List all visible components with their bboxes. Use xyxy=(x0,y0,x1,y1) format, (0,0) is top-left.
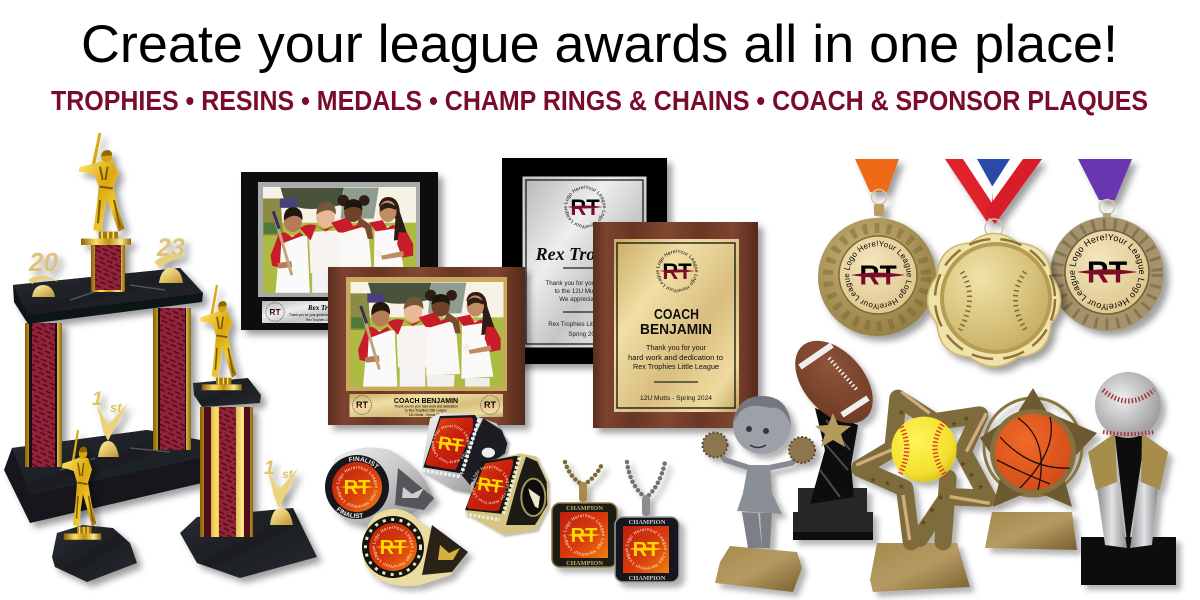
title: Create your league awards all in one place! xyxy=(81,15,1118,74)
pendant: silver champion chain xyxy=(614,460,688,591)
trophy: single-column batter xyxy=(180,285,317,578)
resin: football xyxy=(780,326,888,540)
first-place topper: st xyxy=(282,467,294,481)
small stars: ★ xyxy=(928,505,936,514)
nameplate: Rex Trophies Little League xyxy=(306,318,344,322)
resin: silver baseball xyxy=(1081,372,1176,585)
left logo xyxy=(353,396,371,414)
medal: laurel medal with purple ribbon xyxy=(1050,159,1174,340)
face xyxy=(325,455,389,519)
photo xyxy=(260,185,418,296)
nameplate: Thank you for your generous support xyxy=(289,313,341,317)
ribbon xyxy=(945,159,1042,224)
ring: silver league ring xyxy=(422,413,511,496)
figure: top batter xyxy=(79,133,131,245)
plaque text: to the 12U Mutts team xyxy=(555,288,615,295)
trophy: small single batter xyxy=(52,430,137,582)
nameplate: 12U Mutts - Spring 2024 xyxy=(409,413,443,417)
logo: Your League Logo Here!Your League Logo Here! xyxy=(656,250,698,292)
pendant: bronze champion chain xyxy=(551,460,626,576)
face: Your League Logo Here!Your League Logo Here! xyxy=(372,526,414,568)
pendant: silver champion chain: Your League Logo Here!Your League Logo Here! xyxy=(625,528,667,570)
first-place topper xyxy=(92,389,128,457)
column xyxy=(200,407,253,537)
small stars: ★ xyxy=(968,471,975,480)
small stars: ★ xyxy=(937,493,944,502)
pendant: bronze champion chain: CHAMPION xyxy=(566,560,603,567)
small stars: ★ xyxy=(920,518,927,527)
plaque text: COACH xyxy=(654,306,699,323)
wavy rim xyxy=(928,234,1060,366)
small stars: ★ xyxy=(869,475,877,484)
upper column xyxy=(91,242,125,292)
photo xyxy=(348,280,506,390)
first-place topper: 1 xyxy=(264,458,275,479)
right logo: RT xyxy=(484,400,496,410)
pendant: silver champion chain: RT xyxy=(633,539,659,561)
nameplate: COACH BENJAMIN xyxy=(394,398,458,405)
pendant: silver champion chain: CHAMPION xyxy=(629,575,666,582)
plaque text: Rex Trophies Little League xyxy=(633,364,719,371)
pom-poms xyxy=(702,432,815,463)
ring: gold league ring xyxy=(464,453,552,538)
plaque text: Rex Trophies xyxy=(535,244,634,264)
medal: gold baseball medal with red white blue ribbon xyxy=(928,159,1060,366)
plaque: walnut photo plaque xyxy=(328,267,525,425)
left column xyxy=(25,323,62,467)
logo: RT xyxy=(570,195,600,220)
plaque text: Rex Trophies Little League xyxy=(548,321,622,328)
first-place topper xyxy=(264,458,298,525)
first-place topper: 1 xyxy=(92,389,103,410)
small stars: ★ xyxy=(950,420,958,429)
face: RT xyxy=(380,537,406,559)
face: FINALIST xyxy=(348,456,380,468)
face: Your League Logo Here!Your League Logo Here! xyxy=(336,466,378,508)
logo: Your League Logo Here!Your League Logo Here! xyxy=(1070,234,1144,310)
plaque text: Thank you for your generous xyxy=(545,280,625,287)
top plank xyxy=(13,268,203,324)
trophy: large double-column baseball trophy xyxy=(4,133,203,523)
resin: softball star xyxy=(856,392,990,592)
small stars: ★ xyxy=(959,460,967,469)
plaque text: hard work and dedication to xyxy=(628,355,723,362)
face xyxy=(362,516,424,578)
small stars: ★ xyxy=(963,414,970,423)
pendant: silver champion chain: CHAMPION xyxy=(629,519,666,526)
face: RT xyxy=(476,473,504,497)
plaque: black sponsor plaque with silver plate xyxy=(502,158,676,374)
pendant: bronze champion chain: RT xyxy=(571,525,597,547)
small stars: ★ xyxy=(884,479,891,488)
plaque text: 12U Mutts - Spring 2024 xyxy=(640,395,712,402)
logo: RT xyxy=(662,259,692,284)
year topper 23: 23 xyxy=(156,234,185,262)
right column xyxy=(153,308,191,450)
plaque text: BENJAMIN xyxy=(640,321,712,338)
right logo xyxy=(481,396,499,414)
face: RT xyxy=(344,477,370,499)
face: Your League Logo Here!Your League Logo Here! xyxy=(432,424,470,464)
pendant: bronze champion chain: CHAMPION xyxy=(566,505,603,512)
plaque text: We appreciate you xyxy=(559,296,611,303)
nameplate: RT xyxy=(269,307,281,317)
plaque text xyxy=(535,244,634,338)
small stars xyxy=(869,408,984,527)
year topper 20 xyxy=(28,247,58,297)
nameplate xyxy=(262,301,362,323)
ring: gold star ring xyxy=(362,508,475,594)
baseball seams xyxy=(960,272,1027,332)
year topper 20: 20 xyxy=(28,247,58,277)
first-place topper: st xyxy=(110,400,122,415)
face: Your League Logo Here!Your League Logo Here! xyxy=(471,465,509,504)
base plank xyxy=(4,430,202,523)
plaque text: Spring 2024 xyxy=(568,331,602,338)
medal: star medal with orange ribbon xyxy=(818,159,940,346)
pendant: bronze champion chain: Your League Logo Here!Your League Logo Here! xyxy=(563,514,605,556)
face: RT xyxy=(437,432,465,456)
face: FINALIST xyxy=(336,506,363,518)
face xyxy=(426,417,474,470)
nameplate: Rex Trophies xyxy=(307,304,347,312)
nameplate: Thank you for your hard work and dedication xyxy=(394,404,458,408)
left logo: RT xyxy=(356,400,368,410)
resin: basketball star xyxy=(980,388,1097,550)
small stars: ★ xyxy=(898,482,905,491)
plaque: black photo plaque xyxy=(241,172,438,330)
small stars: ★ xyxy=(898,408,905,417)
nameplate xyxy=(350,394,503,417)
logo: RT xyxy=(1087,257,1128,290)
plaque text: Thank you for your xyxy=(646,345,707,352)
plaque: walnut coach plaque xyxy=(593,222,768,438)
resin: cheerleader xyxy=(702,396,815,592)
nameplate: to Rex Trophies Little League xyxy=(405,408,447,412)
logo: Your League Logo Here!Your League Logo Here! xyxy=(564,186,606,228)
logo: Your League Logo Here!Your League Logo Here! xyxy=(844,240,912,310)
ring: silver finalist ring xyxy=(325,447,442,533)
year topper 23 xyxy=(154,234,186,283)
plaque text xyxy=(628,306,723,402)
small stars: ★ xyxy=(977,482,984,491)
logo: RT xyxy=(859,260,897,291)
